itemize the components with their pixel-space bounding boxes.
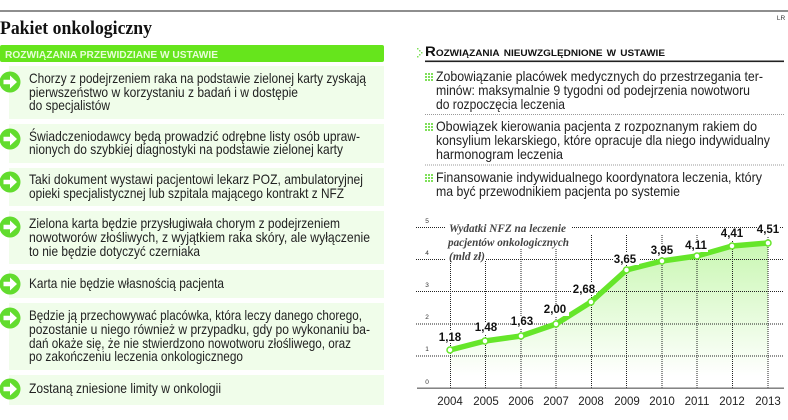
- data line: [450, 243, 768, 350]
- item 6: po zakończeniu leczenia onkologicznego: [29, 349, 243, 364]
- item 4: nowotworów złośliwych, z wyjątkiem raka skóry, ale wyłączenie: [29, 230, 370, 245]
- y axis labels: 0: [425, 379, 429, 386]
- x axis labels: 2008: [578, 396, 604, 408]
- source credit: LR: [777, 15, 785, 22]
- y axis labels: [425, 218, 429, 386]
- panel: solutions in the act: [0, 45, 384, 405]
- x axis labels: 2009: [614, 396, 640, 408]
- item 5: Karta nie będzie własnością pacjenta: [29, 276, 224, 291]
- x axis labels: 2006: [508, 396, 534, 408]
- value labels: 4,41: [721, 228, 744, 240]
- chart title: [446, 221, 571, 263]
- item 4: [0, 211, 384, 264]
- chart title: Wydatki NFZ na leczenie: [449, 221, 567, 235]
- x axis labels: 2011: [685, 396, 709, 408]
- item 1: do specjalistów: [29, 98, 110, 113]
- value labels: 1,63: [511, 316, 533, 328]
- item 2: nionych do szybkiej diagnostyki na podstawie zielonej karty: [29, 142, 343, 157]
- item 5: [0, 270, 384, 298]
- value labels: 2,00: [544, 304, 566, 316]
- value labels: 2,68: [573, 284, 596, 296]
- grid: [416, 228, 784, 388]
- y axis labels: 3: [425, 282, 429, 289]
- x axis labels: 2013: [755, 396, 781, 408]
- title: Pakiet onkologiczny: [0, 18, 152, 39]
- y axis labels: 2: [425, 314, 429, 321]
- right item 2: harmonogram leczenia: [436, 146, 563, 162]
- chart title: (mld zł): [449, 249, 485, 263]
- item 7: Zostaną zniesione limity w onkologii: [29, 381, 221, 396]
- left heading bar: ROZWIĄZANIA PRZEWIDZIANE W USTAWIE: [5, 49, 218, 61]
- line chart: NFZ spending: [416, 218, 784, 408]
- item 4: to nie będzie dotyczyć czerniaka: [29, 244, 200, 259]
- x axis labels: 2012: [719, 396, 745, 408]
- item 6: dań okaże się, że nie stwierdzono nowotworu złośliwego, oraz: [29, 336, 351, 351]
- panel: solutions not included: [417, 44, 784, 199]
- item 3: opieki specjalistycznej lub szpitala mającego kontrakt z NFZ: [29, 186, 344, 201]
- y axis labels: 1: [425, 346, 429, 353]
- left heading bar: [0, 45, 384, 62]
- value labels: 4,51: [757, 224, 780, 236]
- item 1: pierwszeństwo w korzystaniu z badań i w dostępie: [29, 85, 298, 100]
- right item 1: do rozpoczęcia leczenia: [436, 96, 565, 112]
- value labels: 1,18: [439, 332, 462, 344]
- right item 3: [425, 169, 762, 199]
- value labels: 3,65: [614, 254, 637, 266]
- item 1: Chorzy z podejrzeniem raka na podstawie zielonej karty zyskają: [29, 71, 366, 86]
- item 6: Będzie ją przechowywać placówka, która leczy danego chorego,: [29, 308, 362, 323]
- item 3: Taki dokument wystawi pacjentowi lekarz POZ, ambulatoryjnej: [29, 172, 363, 187]
- item 6: pozostanie u niego również w przypadku, gdy po wykonaniu ba-: [29, 322, 370, 337]
- data points: [447, 240, 771, 353]
- item 7: [0, 375, 384, 405]
- value labels: 4,11: [685, 240, 707, 252]
- item 1: [0, 66, 384, 119]
- item 3: [0, 168, 384, 206]
- x axis labels: 2007: [543, 396, 569, 408]
- area under line: [450, 243, 768, 388]
- right item 3: ma być przewodnikiem pacjenta po systemie: [436, 183, 680, 199]
- right heading: [417, 44, 784, 62]
- x axis labels: [437, 396, 781, 408]
- item 4: Zielona karta będzie przysługiwała chorym z podejrzeniem: [29, 216, 340, 231]
- right item 2: [425, 118, 770, 162]
- x axis labels: 2004: [437, 396, 463, 408]
- right item 2: Obowiązek kierowania pacjenta z rozpoznanym rakiem do: [436, 118, 757, 134]
- right item 1: minów: maksymalnie 9 tygodni od podejrzenia nowotworu: [436, 82, 750, 98]
- top rule: [0, 10, 788, 12]
- item 2: Świadczeniodawcy będą prowadzić odrębne listy osób upraw-: [29, 129, 360, 144]
- y axis labels: 4: [425, 250, 429, 257]
- value labels: 3,95: [651, 245, 674, 257]
- value labels: 1,48: [475, 322, 498, 334]
- x axis: [417, 388, 784, 389]
- chart title: pacjentów onkologicznych: [447, 235, 569, 249]
- right item 1: [425, 68, 763, 112]
- x axis labels: 2010: [649, 396, 675, 408]
- value labels: [439, 224, 780, 344]
- y axis labels: 5: [425, 218, 429, 225]
- right heading: Rozwiązania nieuwzględnione w ustawie: [425, 44, 665, 59]
- x axis labels: 2005: [473, 396, 499, 408]
- item 2: [0, 124, 384, 163]
- item 6: [0, 303, 384, 370]
